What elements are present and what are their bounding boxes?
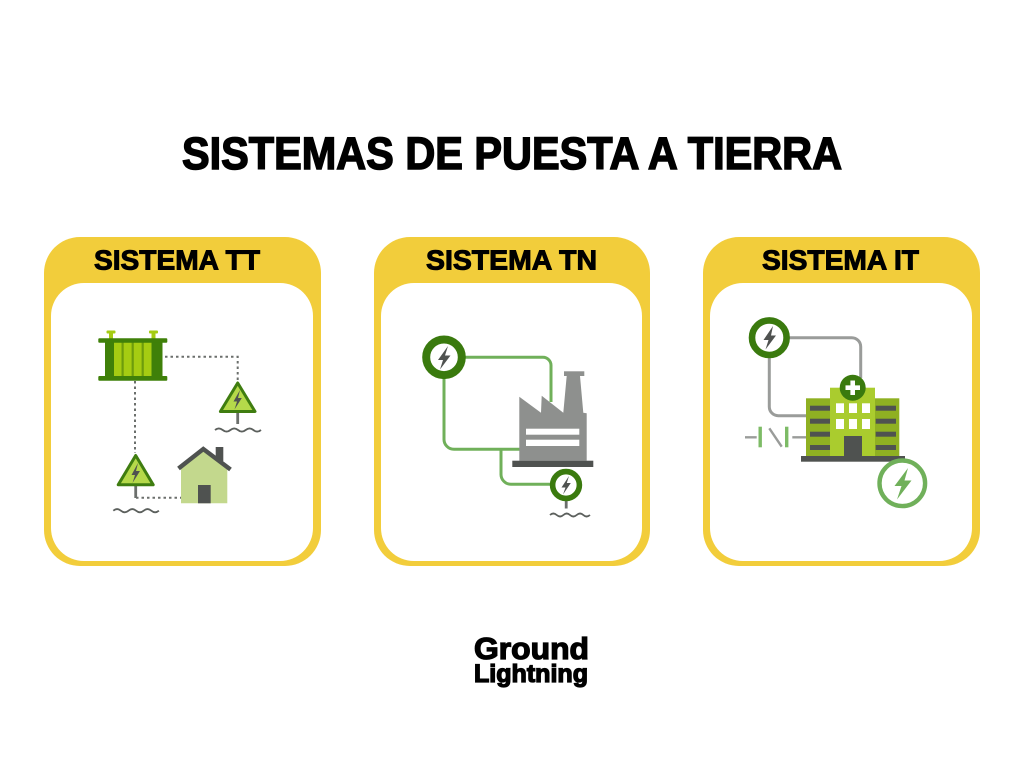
logo xyxy=(474,631,589,688)
panel: sistema IT xyxy=(703,237,980,566)
icon: warning sign right xyxy=(215,383,261,432)
title: SISTEMAS DE PUESTA A TIERRA xyxy=(182,128,842,179)
panel inner card xyxy=(381,283,642,561)
panel inner card xyxy=(51,283,313,561)
icon: open switch xyxy=(745,427,806,447)
panel: sistema TN xyxy=(374,237,650,566)
icon: factory xyxy=(512,371,593,467)
icon: hospital xyxy=(801,375,905,462)
panel inner card xyxy=(710,283,972,561)
panel background xyxy=(44,237,321,566)
green wiring xyxy=(444,357,552,484)
panel background xyxy=(703,237,980,566)
icon: power node top xyxy=(752,320,787,355)
icon: large power node xyxy=(426,340,462,375)
panel: sistema TT xyxy=(44,237,321,566)
icon: warning sign left xyxy=(113,456,159,512)
icon: house xyxy=(178,447,230,503)
panel heading: SISTEMA TT xyxy=(94,244,260,276)
logo: Lightning xyxy=(474,660,588,688)
logo: Ground xyxy=(474,631,589,666)
panel heading: SISTEMA TN xyxy=(426,244,597,276)
panel heading: SISTEMA IT xyxy=(762,244,919,276)
icon: transformer xyxy=(98,330,167,381)
panel background xyxy=(374,237,650,566)
grey wiring xyxy=(769,338,861,416)
dotted connection lines xyxy=(135,357,238,498)
icon: small power node with ground xyxy=(550,472,590,516)
icon: power node bottom xyxy=(880,460,925,506)
